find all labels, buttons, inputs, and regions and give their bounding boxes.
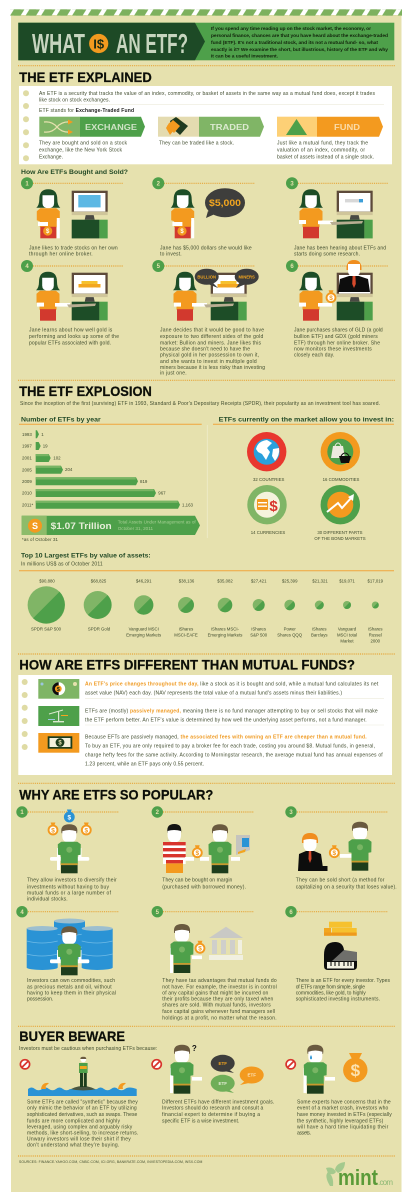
bubble chart: top 10 largest ETFs: iShares — [368, 627, 383, 632]
reason 6: sophisticated investing instruments. — [296, 997, 380, 1003]
reason 1: $ — [84, 827, 88, 834]
icon: oil barrels — [27, 918, 113, 970]
header intro text: exactly is it? We examine the short, but illustrious, history of the ETF and why — [211, 47, 388, 53]
icon: 14 currencies: 14 CURRENCIES — [251, 530, 285, 535]
logo: mint.com: mint — [338, 1165, 379, 1190]
step 2: 2 — [157, 182, 161, 188]
heading: why are ETFs so popular: WHY ARE ETFS SO POPULAR? — [19, 786, 213, 802]
bubble chart: top 10 largest ETFs — [19, 553, 394, 644]
panel: definition card — [19, 86, 392, 164]
banner: $1.07 trillion: Total Assets Under Management as of — [118, 520, 196, 525]
figure: short seller in suit — [298, 833, 328, 871]
heading: the ETF explained: THE ETF EXPLAINED — [19, 69, 152, 85]
step 2: $ — [180, 229, 184, 235]
question mark: ? — [192, 1044, 197, 1053]
step 1: $ — [46, 229, 50, 235]
step 5 — [152, 260, 265, 377]
step 2: to invest. — [160, 252, 182, 258]
bubble chart: top 10 largest ETFs: Emerging Markets — [126, 633, 161, 638]
warning 2: specific ETF is a wise investment. — [162, 1118, 239, 1124]
step 6: bullion ETF) and GDX (gold miners — [294, 334, 378, 340]
difference text 3: To buy an ETF, you are only required to pay a broker fee for each trade, costing you around $8. Mutual funds, in general, — [85, 743, 375, 749]
reason 4: having to keep them in their physical — [27, 990, 116, 996]
text: fund: valuation of an index, commodity, or — [277, 147, 365, 153]
banner: traded — [158, 117, 264, 137]
difference text 2: ETFs are (mostly) passively managed, meaning there is no fund manager attempting to buy or sell stocks that will make — [85, 708, 378, 714]
bar chart: number of ETFs by year: 967 — [158, 490, 166, 495]
bar chart: number of ETFs by year: 2005 — [22, 467, 32, 472]
bubble chart: top 10 largest ETFs: iShares — [312, 627, 327, 632]
reason 1: 1 — [20, 810, 24, 816]
bubble chart: top 10 largest ETFs: MSCI total — [337, 633, 357, 638]
bubble chart: top 10 largest ETFs: Top 10 Largest ETFs by value of assets: — [21, 553, 151, 560]
bubble chart: top 10 largest ETFs: $90,880 — [39, 578, 55, 583]
subheading: How Are ETFs Bought and Sold? — [21, 169, 128, 176]
banner: traded: TRADED — [210, 123, 249, 132]
section: ETFs versus mutual funds — [18, 654, 395, 775]
bar chart: number of ETFs by year: 2009 — [22, 479, 32, 484]
reason 1: $ — [51, 827, 55, 834]
reason 5: not have. For example, the investor is in control — [162, 984, 277, 990]
step 5: in just one. — [160, 371, 187, 377]
step 6: closely each day. — [294, 353, 334, 359]
definition text — [39, 91, 384, 114]
title: AN ETF? — [116, 28, 188, 59]
warning 1: don't understand what they're buying. — [27, 1143, 119, 1149]
step 5: market: Bullion and miners. Jane likes this — [160, 340, 262, 346]
warning 3: will have a hard time liquidating their — [297, 1124, 389, 1130]
reason 5: face capital gains whenever fund managers sell — [162, 1009, 275, 1015]
sources: SOURCES: FINANCE.YAHOO.COM, CNBC.COM, ICI.ORG, BANKRATE.COM, INVESTOPEDIA.COM, WSX.COM — [19, 1160, 202, 1164]
bubble chart: top 10 largest ETFs: 2000 — [371, 639, 381, 644]
icon: 30 bond markets: 30 DIFFERENT PARTS — [317, 530, 363, 535]
reason 5: 5 — [156, 910, 160, 916]
step 1: Jane likes to trade stocks on her own — [29, 245, 118, 251]
footnote: *as of October 31 — [22, 537, 59, 542]
icon: dollar bill — [38, 733, 79, 753]
icon: bank — [209, 927, 243, 960]
bubble chart: top 10 largest ETFs: iShares MSCI- — [211, 627, 240, 632]
reason 4: Investors can own commodities, such — [27, 978, 115, 984]
difference text 3: charge hefty fees for the same activity. According to Morningstar research, the average mutual fund has annual expenses of — [85, 753, 383, 759]
step 3: 3 — [290, 182, 294, 188]
reason 1: They allow investors to diversify their — [27, 878, 117, 884]
heading: how are ETFs different: HOW ARE ETFS DIFFERENT THAN MUTUAL FUNDS? — [19, 656, 355, 672]
text: fund: Just like a mutual fund, they track the — [277, 140, 368, 146]
reason 3 — [285, 806, 397, 890]
step 4: performing and looks up some of the — [29, 334, 119, 340]
reason 5: of any capital gains that might be incurred on — [162, 990, 269, 996]
explosion intro text: Since the inception of the first (surviving) ETF in 1993, Standard & Poor's Depositary Receipts (SPDR), their popularity as an investment tool has soared. — [20, 401, 380, 407]
bubble: orange ETF: ETF — [247, 1073, 256, 1078]
reason 1 — [16, 806, 117, 903]
bubble chart: top 10 largest ETFs: SPDR S&P 500 — [31, 627, 62, 632]
reason 6: There is an ETF for every investor. Types — [296, 978, 390, 984]
icon: large money bag: $ — [351, 1061, 361, 1080]
step 5: Jane decides that it would be good to have — [160, 328, 264, 334]
bubble chart: top 10 largest ETFs: In millions US$ as of October 2011 — [21, 562, 103, 568]
reason 6 — [285, 906, 390, 1003]
bar chart: number of ETFs by year: 819 — [140, 479, 148, 484]
buyer beware intro text: Investors must be cautious when purchasing ETFs because: — [19, 1046, 157, 1052]
header banner — [18, 23, 394, 60]
header intro text: If you spend any time reading up on the stock market, the economy, or — [211, 26, 371, 32]
difference text 1: asset value (NAV) each day. (NAV represents the total value of a mutual fund's assets minus their liabilities.) — [85, 691, 342, 697]
bubble chart: top 10 largest ETFs: iShares — [251, 627, 266, 632]
header intro text: personal finance, chances are that you have heard about the exchange-traded — [211, 33, 388, 39]
reason 6: commodities, like gold, to highly — [296, 990, 366, 996]
text: exchange: exchange, like the New York Stock — [39, 147, 122, 153]
tear — [310, 1055, 312, 1060]
difference text 1: An ETF's price changes throughout the day, like a stock as it is bought and sold, while a mutual fund calculates its net — [85, 681, 379, 687]
banner: fund: FUND — [334, 123, 360, 132]
section: the ETF explosion — [18, 380, 395, 644]
bubble chart: top 10 largest ETFs: S&P 500 — [250, 633, 268, 638]
step 6: 6 — [290, 264, 294, 270]
panel: differences card — [18, 675, 392, 775]
step 6: Jane purchases shares of GLD (a gold — [294, 328, 383, 334]
reason 1: mutual funds or a large number of — [27, 891, 112, 897]
bar chart: number of ETFs by year: 1,163 — [182, 502, 194, 507]
reason 5: shares are sold. With mutual funds, investors — [162, 1003, 271, 1009]
reason 4: 4 — [20, 910, 24, 916]
warning 1 — [20, 1057, 138, 1149]
difference text 3 — [85, 734, 383, 768]
bar chart: number of ETFs by year: 204 — [65, 467, 73, 472]
reason 3: 3 — [289, 810, 293, 816]
reason 5: $ — [198, 946, 202, 953]
step 5: and she wants to invest in multiple gold — [160, 359, 257, 365]
step 2 — [152, 177, 252, 258]
heading: the ETF explosion: THE ETF EXPLOSION — [19, 383, 152, 399]
icon: 16 commodities — [321, 432, 360, 482]
banner: $1.07 trillion: October 31, 2011 — [118, 526, 153, 531]
step 6: ETF) through her online broker. She — [294, 340, 380, 346]
warning 3: the synthetic, highly leveraged ETFs) — [297, 1118, 384, 1124]
bubble chart: top 10 largest ETFs: $21,321 — [312, 578, 328, 583]
warning 1: funds are more complicated and highly — [27, 1118, 120, 1124]
bubble chart: top 10 largest ETFs: Power — [284, 627, 296, 632]
warning 1: methods, like short-selling, to increase returns. — [27, 1130, 138, 1136]
warning 3: have money invested in ETFs (especially — [297, 1112, 392, 1118]
header intro text: it can be a useful investment. — [211, 54, 279, 60]
heading: buyer beware: BUYER BEWARE — [19, 1028, 125, 1044]
figure: lender in striped shirt — [163, 824, 194, 873]
difference text 2 — [85, 708, 378, 724]
text: exchange: Exchange. — [39, 154, 63, 160]
bubble: dark ETF: ETF — [218, 1061, 227, 1066]
definition text: like stock on stock exchanges. — [39, 98, 110, 104]
icon: 14 currencies: $ — [269, 498, 278, 515]
icon: 30 bond markets — [314, 485, 366, 541]
bubble chart: top 10 largest ETFs: Vanguard MSCI — [129, 627, 159, 632]
banner: $1.07 trillion: S — [32, 521, 38, 531]
bubble: bullion: BULLION — [197, 274, 216, 279]
bar chart: number of ETFs by year: 2011* — [22, 502, 33, 507]
step 1 — [21, 177, 118, 258]
bubble chart: top 10 largest ETFs: $38,136 — [179, 578, 195, 583]
bubble chart: top 10 largest ETFs: MSCI-EAFE — [174, 633, 198, 638]
bar chart: number of ETFs by year: 102 — [53, 456, 61, 461]
warning 3: assets. — [297, 1130, 311, 1136]
reason 2: (purchased with borrowed money). — [162, 884, 246, 890]
bubble: miners: MINERS — [239, 274, 255, 279]
header intro text — [211, 26, 388, 60]
reason 5: They have tax advantages that mutual funds do — [162, 978, 277, 984]
reason 6: 6 — [289, 910, 293, 916]
bubble chart: top 10 largest ETFs: Emerging Markets — [208, 633, 242, 638]
warning 3: event of a market crash, investors who — [297, 1106, 389, 1112]
bubble chart: top 10 largest ETFs: Russel — [369, 633, 382, 638]
icon: 16 commodities: 16 COMMODITIES — [323, 477, 360, 482]
warning 2: Investors should do research and consult a — [162, 1106, 264, 1112]
icon: gold bars — [324, 922, 357, 936]
warning 3 — [286, 1045, 392, 1136]
reason 5: holdings at a profit, no matter what the reason. — [162, 1015, 277, 1021]
step 5: 5 — [157, 264, 161, 270]
bubble chart: top 10 largest ETFs: $25,399 — [282, 578, 298, 583]
difference text 2: the ETF perform better. An ETF's value is determined by how well the underlying asset performs, not a fund manager. — [85, 718, 367, 724]
difference text 3: Because EFTs are passively managed, the associated fees with owning an ETF are cheaper than a mutual fund. — [85, 734, 367, 740]
warning 2: financial expert to determine if buying a — [162, 1112, 260, 1118]
reason 3: capitalizing on a security that loses value). — [296, 884, 397, 890]
reason 1: individual stocks. — [27, 897, 68, 903]
bar chart: number of ETFs by year: Number of ETFs by year — [21, 416, 101, 423]
difference text 3: 1.23 percent, while an ETF pays only 0.55 percent. — [85, 762, 204, 768]
icon: dollar bill: $ — [58, 741, 62, 747]
warning 1: Some ETFs are called "synthetic" because they — [27, 1099, 138, 1105]
warning 2: Different ETFs have different investment goals. — [162, 1099, 274, 1105]
step 1: 1 — [25, 182, 29, 188]
speech bubble: $5,000: $5,000 — [209, 198, 241, 208]
icon: price changes: $ — [57, 687, 60, 693]
logo: mint.com: .com — [378, 1178, 393, 1187]
sources and logo — [18, 1156, 395, 1190]
section: buyer beware — [18, 1026, 395, 1149]
reason 4: possession. — [27, 997, 53, 1003]
title: I$ — [93, 36, 105, 51]
reason 2: 2 — [156, 810, 160, 816]
bubble chart: top 10 largest ETFs: $46,291 — [136, 578, 152, 583]
step 1: through her online broker. — [29, 252, 93, 258]
step 4: popular ETFs associated with gold. — [29, 340, 111, 346]
bar chart: number of ETFs by year: 19 — [43, 444, 48, 448]
bar chart: number of ETFs by year: 2001 — [22, 456, 32, 461]
banner: fund — [277, 117, 383, 137]
reason 2: $ — [195, 850, 199, 857]
bubble chart: top 10 largest ETFs: $17,019 — [368, 578, 384, 583]
text: traded: They can be traded like a stock. — [159, 140, 234, 146]
icon: 30 bond markets: OF THE BOND MARKETS — [314, 536, 366, 541]
text: fund — [277, 140, 374, 160]
banner: exchange — [39, 117, 145, 137]
bubble chart: top 10 largest ETFs: $27,421 — [251, 578, 267, 583]
reason 1: $ — [67, 814, 71, 821]
warning 1: leveraged, using complex and arguably risky — [27, 1124, 133, 1130]
step 5: because she doesn't need to have the — [160, 347, 250, 353]
definition text: ETF stands for Exchange-Traded Fund — [39, 108, 134, 114]
banner: $1.07 trillion: $1.07 Trillion — [51, 521, 112, 531]
bubble chart: top 10 largest ETFs: Barclays — [311, 633, 328, 638]
icon: 32 countries — [247, 432, 286, 482]
section: why ETFs are popular — [16, 783, 397, 1021]
bubble chart: top 10 largest ETFs: $35,082 — [217, 578, 233, 583]
reason 2: They can be bought on margin — [162, 878, 233, 884]
reason 3: They can be sold short (a method for — [296, 878, 385, 884]
bubble chart: top 10 largest ETFs: Vanguard — [338, 627, 357, 632]
text: exchange — [39, 140, 128, 160]
subheading: investable markets: ETFs currently on the market allow you to invest in: — [219, 416, 394, 423]
step 5: exposure to two different sides of the gold — [160, 334, 264, 340]
step 6: now monitors these investments — [294, 347, 372, 353]
step 6 — [286, 260, 383, 359]
reason 1: investments without having to buy — [27, 884, 110, 890]
bubble chart: top 10 largest ETFs: SPDR Gold — [88, 627, 111, 632]
reason 2 — [152, 806, 250, 890]
icon: 14 currencies — [247, 485, 287, 535]
logo: mint.com — [326, 1162, 393, 1190]
step 3: starts doing some research. — [294, 252, 360, 258]
icon: 32 countries: 32 COUNTRIES — [253, 477, 284, 482]
bubble chart: top 10 largest ETFs: Market — [340, 639, 354, 644]
step 5: miners because it is less risky than investing — [160, 365, 265, 371]
section: how ETFs are bought and sold — [21, 169, 388, 377]
reason 4 — [16, 906, 116, 1003]
reason 5: their profits because they are only taxed when — [162, 997, 274, 1003]
step 4 — [21, 260, 119, 346]
reason 3: $ — [332, 850, 336, 857]
bubble chart: top 10 largest ETFs: $68,825 — [91, 578, 107, 583]
step 6: $ — [329, 295, 333, 302]
warning 2 — [152, 1044, 274, 1124]
step 4: Jane learns about how well gold is — [29, 328, 113, 334]
definition text: An ETF is a security that tracks the value of an index, commodity, or basket of assets in the same way as a mutual fund does, except it trades — [39, 91, 375, 97]
icon: passively managed scale — [38, 706, 79, 726]
bar chart: number of ETFs by year: 1997 — [22, 444, 32, 449]
text: exchange: They are bought and sold on a stock — [39, 140, 128, 146]
title: WHAT — [32, 28, 85, 59]
bar chart: number of ETFs by year: 1993 — [22, 432, 32, 437]
section: the ETF explained — [18, 66, 395, 164]
header intro text: fund (ETF). It's not a traditional stock, and its not a mutual fund- so, what — [211, 40, 378, 46]
bar chart: number of ETFs by year: 1 — [41, 432, 44, 437]
warning 3: Some experts have concerns that in the — [297, 1099, 391, 1105]
warning 1: Unwary investors will lose their shirt if they — [27, 1137, 131, 1143]
bubble chart: top 10 largest ETFs: Shares QQQ — [277, 633, 303, 638]
step 3: Jane has been hearing about ETFs and — [294, 245, 386, 251]
bubble chart: top 10 largest ETFs: $19,071 — [339, 578, 355, 583]
warning 1: sophisticated derivatives, such as swaps. These — [27, 1112, 138, 1118]
bubble chart: top 10 largest ETFs: iShares — [179, 627, 193, 632]
step 3 — [286, 177, 386, 258]
title — [32, 28, 188, 59]
icon: price changes — [38, 679, 79, 699]
reason 6: of ETFs range from simple, single — [296, 984, 365, 990]
text: fund: basket of assets instead of a single stock. — [277, 154, 374, 160]
bar chart: number of ETFs by year — [19, 416, 207, 538]
reason 4: as precious metals and oil, without — [27, 984, 112, 990]
illustration: stranded investor on island — [28, 1057, 137, 1096]
icon: broker phone — [236, 835, 250, 855]
difference text 1 — [85, 681, 379, 697]
step 5: physical gold in her possession to own it, — [160, 353, 259, 359]
warning 1: only mimic the behavior of an ETF by utilizing — [27, 1106, 137, 1112]
banner: exchange: EXCHANGE — [85, 123, 138, 132]
banner: $1.07 trillion — [22, 516, 200, 535]
step 4: 4 — [25, 264, 29, 270]
icon: piano — [324, 942, 357, 970]
manager on screen — [338, 260, 370, 292]
step 2: Jane has $5,000 dollars she would like — [160, 245, 252, 251]
bubble: green ETF: ETF — [218, 1081, 227, 1086]
reason 5 — [152, 906, 277, 1021]
bar chart: number of ETFs by year: 2010 — [22, 491, 32, 496]
